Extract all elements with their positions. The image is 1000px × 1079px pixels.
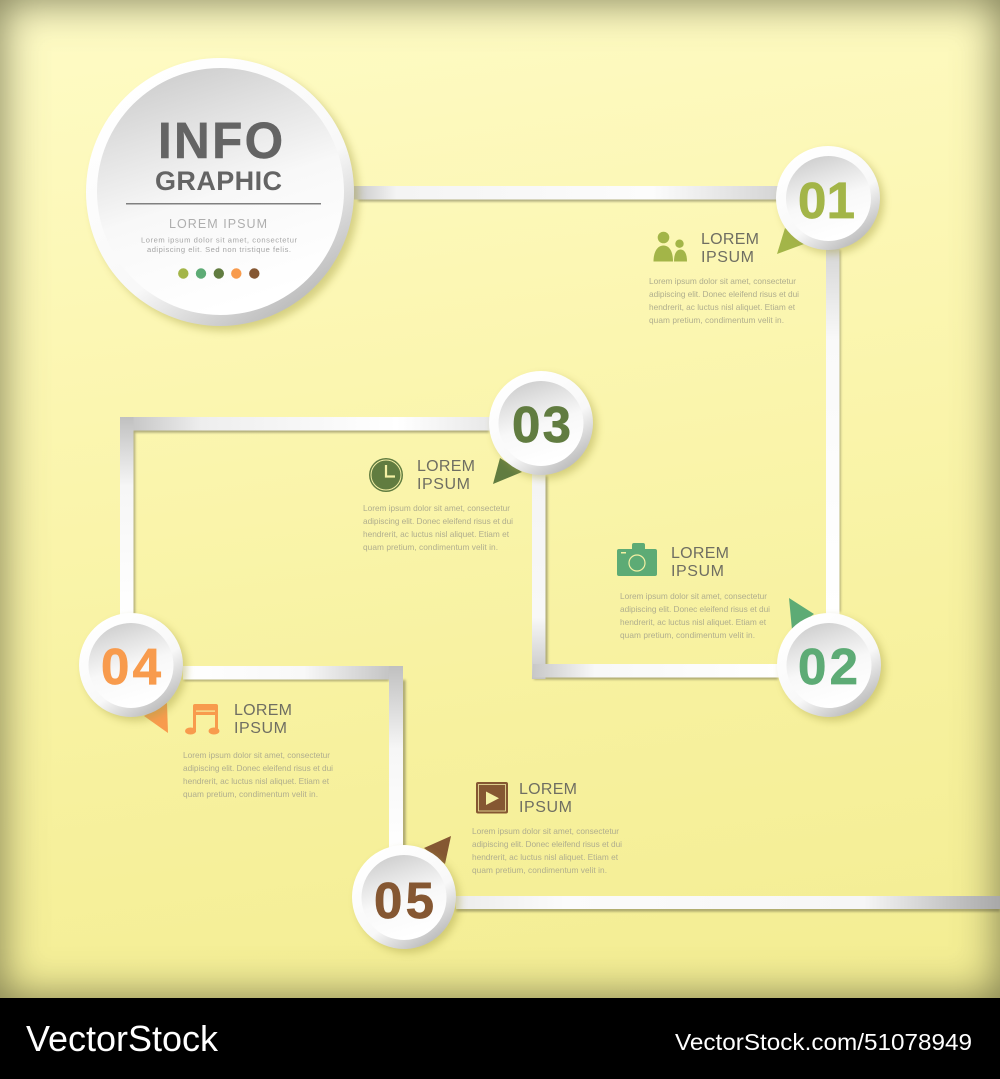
label 04: IPSUM [234, 720, 287, 737]
connecting ribbon path [120, 186, 1000, 912]
label 03: LOREM [417, 458, 475, 475]
text 02: quam pretium, condimentum velit in. [620, 630, 755, 640]
badge 04 [79, 613, 183, 717]
label 04 [234, 702, 292, 737]
badge 02 [777, 613, 881, 717]
text 02: hendrerit, ac luctus nisl aliquet. Etiam et [620, 617, 767, 627]
step 05 [352, 781, 622, 953]
text 01: Lorem ipsum dolor sit amet, consectetur [649, 276, 796, 286]
intro text: Lorem ipsum dolor sit amet, consectetur [141, 236, 297, 244]
badge 04: 04 [101, 638, 162, 695]
pointer 02 [789, 598, 814, 630]
icon: music note [185, 704, 220, 734]
badge 01 [776, 146, 880, 250]
heading: GRAPHIC: GRAPHIC [155, 166, 282, 196]
badge 05: 05 [374, 872, 434, 929]
label 01: IPSUM [701, 249, 754, 266]
badge 03 [489, 371, 593, 475]
main title circle [86, 58, 359, 331]
badge 03: 03 [512, 396, 571, 453]
label 05: LOREM [519, 781, 577, 798]
text 04 [183, 750, 333, 799]
pointer 01 [777, 228, 804, 254]
intro text [141, 236, 297, 254]
text 01: hendrerit, ac luctus nisl aliquet. Etiam et [649, 302, 796, 312]
text 05: hendrerit, ac luctus nisl aliquet. Etiam et [472, 852, 619, 862]
text 02: Lorem ipsum dolor sit amet, consectetur [620, 591, 767, 601]
badge 01: 01 [798, 172, 855, 229]
pointer 05 [424, 836, 451, 864]
icon: camera [617, 543, 657, 576]
badge 02: 02 [798, 638, 858, 695]
text 02: adipiscing elit. Donec eleifend risus et dui [620, 604, 770, 614]
label 03: IPSUM [417, 476, 470, 493]
icon: people [654, 232, 687, 262]
text 03: Lorem ipsum dolor sit amet, consectetur [363, 503, 510, 513]
title divider [126, 203, 321, 204]
step 02 [617, 543, 885, 721]
text 03: adipiscing elit. Donec eleifend risus et dui [363, 516, 513, 526]
text 05: quam pretium, condimentum velit in. [472, 865, 607, 875]
footer watermark left: VectorStock [26, 1018, 219, 1059]
text 01: quam pretium, condimentum velit in. [649, 315, 784, 325]
label 04: LOREM [234, 702, 292, 719]
label 05: IPSUM [519, 799, 572, 816]
text 04: Lorem ipsum dolor sit amet, consectetur [183, 750, 330, 760]
step 03 [363, 371, 597, 552]
pointer 03 [493, 458, 522, 484]
label 02: IPSUM [671, 563, 724, 580]
badge 05 [352, 845, 456, 949]
subheading: LOREM IPSUM [169, 217, 267, 231]
text 05: adipiscing elit. Donec eleifend risus et dui [472, 839, 622, 849]
heading: INFO: INFO [158, 112, 283, 169]
label 01: LOREM [701, 231, 759, 248]
step 01 [649, 146, 884, 325]
step 04 [79, 613, 333, 799]
label 03 [417, 458, 475, 493]
text 02 [620, 591, 770, 640]
color dots [178, 268, 260, 279]
text 03 [363, 503, 513, 552]
text 03: hendrerit, ac luctus nisl aliquet. Etiam et [363, 529, 510, 539]
icon: play button [476, 782, 508, 814]
intro text: adipiscing elit. Sed non tristique felis. [147, 245, 291, 254]
text 04: hendrerit, ac luctus nisl aliquet. Etiam et [183, 776, 330, 786]
icon: clock [369, 458, 403, 492]
label 05 [519, 781, 577, 816]
text 01 [649, 276, 799, 325]
footer watermark right: VectorStock.com/51078949 [675, 1029, 972, 1055]
label 02 [671, 545, 729, 580]
label 01 [701, 231, 759, 266]
text 01: adipiscing elit. Donec eleifend risus et dui [649, 289, 799, 299]
text 04: quam pretium, condimentum velit in. [183, 789, 318, 799]
text 05: Lorem ipsum dolor sit amet, consectetur [472, 826, 619, 836]
pointer 04 [144, 703, 168, 733]
text 03: quam pretium, condimentum velit in. [363, 542, 498, 552]
text 05 [472, 826, 622, 875]
text 04: adipiscing elit. Donec eleifend risus et dui [183, 763, 333, 773]
label 02: LOREM [671, 545, 729, 562]
